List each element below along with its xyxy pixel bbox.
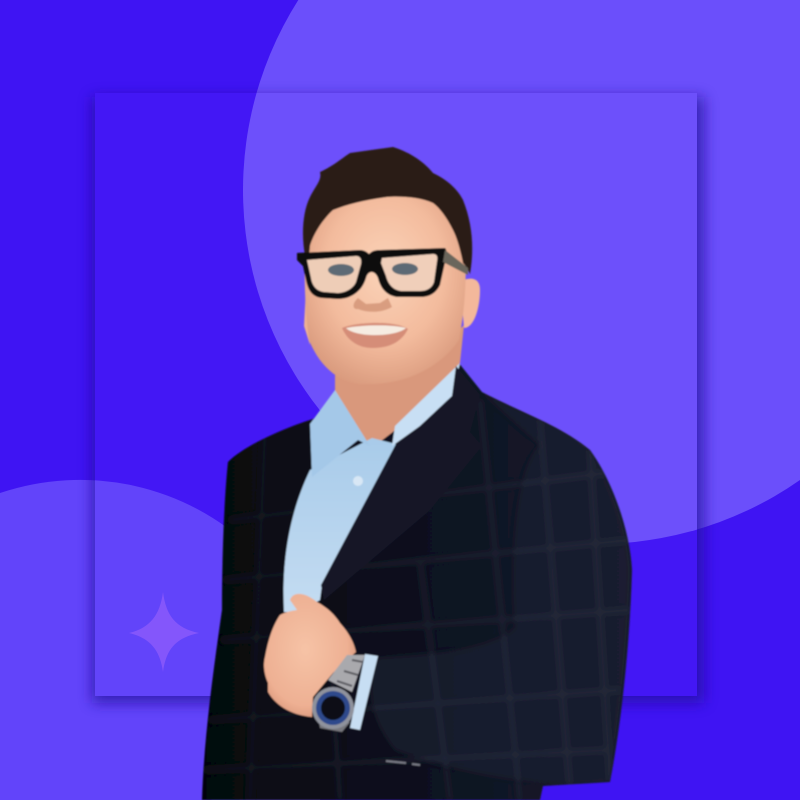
icon: wristwatch	[312, 655, 365, 732]
eyes	[328, 263, 418, 276]
face	[305, 188, 466, 384]
shirt	[284, 363, 460, 612]
mouth	[342, 323, 408, 348]
icon: glasses	[297, 248, 468, 299]
sleeve	[371, 392, 632, 784]
lower left background circle	[0, 480, 330, 800]
lapel	[321, 366, 482, 600]
shirt cuff	[350, 654, 378, 730]
icon: four-point sparkle	[129, 592, 199, 672]
hair	[303, 147, 472, 274]
nose shadow	[354, 298, 392, 312]
hand	[264, 594, 356, 717]
large background circle	[243, 0, 800, 544]
neck	[335, 325, 464, 448]
sleeve buttons	[386, 761, 420, 765]
jacket	[202, 362, 632, 800]
panel shadow	[92, 97, 704, 703]
ears	[304, 279, 480, 345]
panel: framed square	[95, 93, 697, 696]
person	[202, 147, 632, 800]
